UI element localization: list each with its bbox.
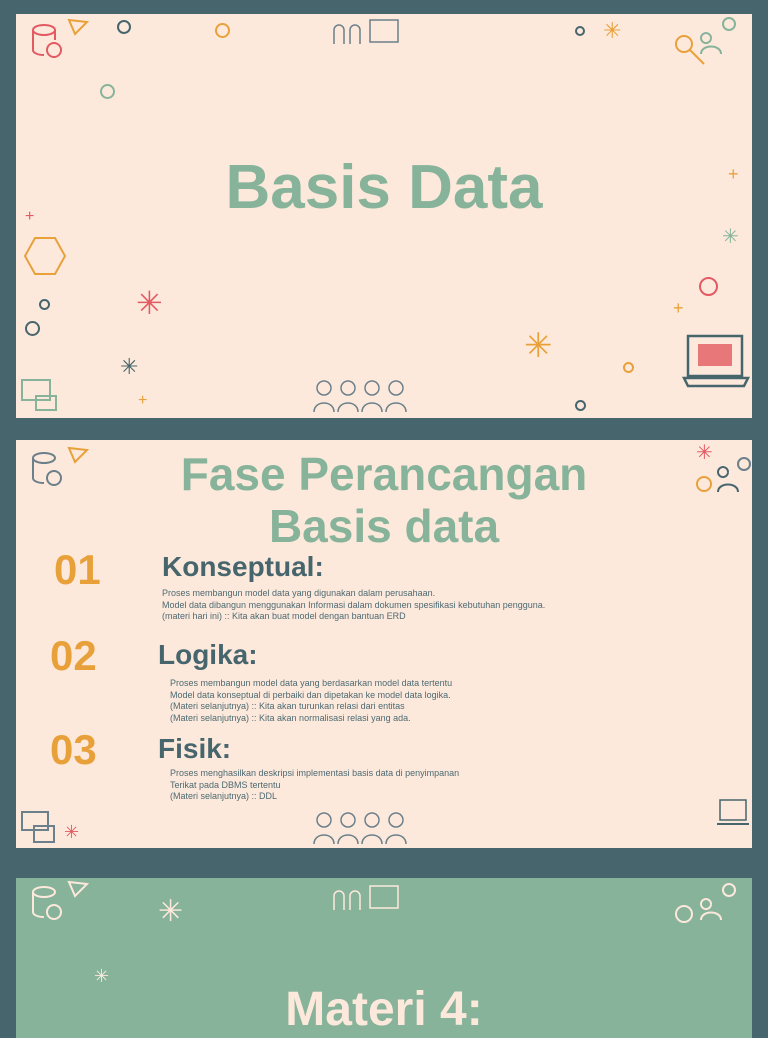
icon: people — [333, 885, 399, 910]
slide 3 — [16, 878, 752, 1038]
slide 1 — [16, 14, 752, 418]
icon: hexagon — [24, 237, 66, 275]
title — [181, 448, 587, 552]
title: Materi 4: — [285, 983, 483, 1036]
icon: devices — [21, 811, 79, 843]
title: Fase Perancangan — [181, 448, 587, 500]
item 01: (materi hari ini) :: Kita akan buat model dengan bantuan ERD — [162, 611, 406, 621]
item 03: 03 — [50, 726, 97, 773]
item 02: 02 — [50, 632, 97, 679]
icon: four people — [313, 380, 407, 412]
item 01: Proses membangun model data yang digunakan dalam perusahaan. — [162, 588, 435, 598]
icon: person magnifier — [675, 883, 736, 923]
item 02: (Materi selanjutnya) :: Kita akan normalisasi relasi yang ada. — [170, 712, 411, 722]
item 01: Konseptual: — [162, 551, 324, 582]
title: Basis Data — [225, 153, 543, 222]
item 03: (Materi selanjutnya) :: DDL — [170, 791, 277, 801]
slide 1: ✳ — [524, 327, 552, 365]
icon: database — [32, 18, 90, 58]
slide 2: ✳ — [696, 442, 713, 464]
item 02: Logika: — [158, 639, 258, 670]
icon: four people — [313, 812, 407, 844]
slide 2 — [16, 440, 752, 848]
item 03: Terikat pada DBMS tertentu — [170, 780, 281, 790]
icon: people — [333, 19, 399, 44]
item 01: Model data dibangun menggunakan Informasi dalam dokumen spesifikasi kebutuhan pengguna. — [162, 600, 545, 610]
item 01: 01 — [54, 546, 101, 593]
slide 1: ✳ — [120, 354, 138, 379]
item 02: Proses membangun model data yang berdasarkan model data tertentu — [170, 678, 452, 688]
slide 1: + — [673, 298, 684, 318]
icon: database — [32, 880, 89, 920]
slide 3: ✳ — [158, 895, 183, 928]
item 03: Proses menghasilkan deskripsi implementasi basis data di penyimpanan — [170, 768, 459, 778]
icon: devices: ✳ — [64, 822, 79, 842]
icon: laptop — [717, 799, 749, 825]
slide 1: + — [138, 392, 147, 409]
icon: laptop chart — [682, 334, 750, 388]
item 02: (Materi selanjutnya) :: Kita akan turunkan relasi dari entitas — [170, 701, 405, 711]
title: Basis data — [269, 500, 499, 552]
icon: devices — [21, 379, 57, 411]
item 02: Model data konseptual di perbaiki dan dipetakan ke model data logika. — [170, 690, 451, 700]
slide 1: ✳ — [722, 226, 739, 248]
icon: person magnifier — [696, 457, 751, 492]
icon: database — [32, 446, 90, 486]
slide 1: + — [25, 208, 34, 225]
slide 1: + — [728, 164, 739, 184]
item 03: Fisik: — [158, 733, 231, 764]
item 03 — [50, 726, 459, 801]
slide 1: ✳ — [603, 18, 621, 43]
item 01 — [54, 546, 545, 621]
slide 3: ✳ — [94, 966, 109, 986]
item 02 — [50, 632, 452, 723]
slide 1: ✳ — [136, 285, 163, 321]
icon: person magnifier — [675, 17, 736, 65]
